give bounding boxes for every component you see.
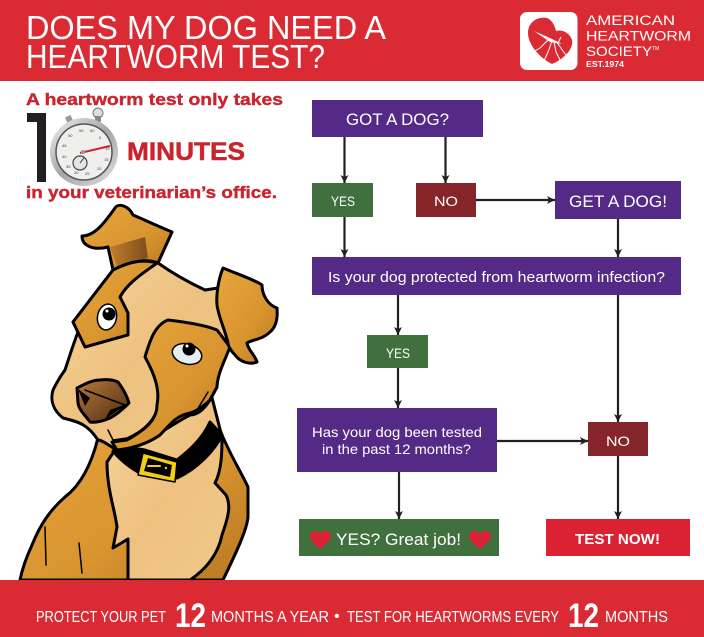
big numeral 1 of the 10 <box>27 113 46 182</box>
icon: stopwatch as the 0 of the 10: 50 <box>68 133 73 138</box>
big numeral 1 of the 10: 1 <box>14 93 69 203</box>
ear inner <box>110 237 148 268</box>
dog floppy ear <box>217 268 277 363</box>
illustration: dog <box>20 205 277 580</box>
logo: American Heartworm Society: SOCIETY <box>586 43 653 59</box>
footer band: • <box>334 608 340 625</box>
footer band: PROTECT YOUR PET <box>36 609 166 626</box>
fur lines <box>45 527 82 573</box>
icon: stopwatch as the 0 of the 10: 10 <box>105 146 110 151</box>
box: great job: YES? Great job! <box>336 530 461 549</box>
text: in your veterinarian's office: in your veterinarian’s office. <box>26 183 277 202</box>
forehead and left eye patch <box>73 261 157 347</box>
icon: stopwatch as the 0 of the 10: 55 <box>79 128 84 133</box>
header band <box>0 0 704 81</box>
icon: heart right <box>469 531 491 549</box>
dog upright ear <box>82 205 172 270</box>
box: yes <box>312 183 373 217</box>
footer band <box>0 580 704 637</box>
box: tested question: in the past 12 months? <box>322 441 471 457</box>
box: no <box>416 183 476 217</box>
muzzle lines <box>108 392 208 440</box>
box: yes, protected <box>367 335 428 368</box>
box: yes, protected: YES <box>386 345 410 361</box>
box: protected question <box>312 257 681 295</box>
right eye patch <box>112 320 230 450</box>
arrows <box>344 137 618 519</box>
text: minutes: MINUTES <box>127 138 245 166</box>
box: test now <box>546 519 690 556</box>
text: heartworm test only takes: A heartworm test only takes <box>26 90 283 109</box>
logo: American Heartworm Society: HEARTWORM <box>586 28 691 44</box>
dog nose <box>77 380 129 422</box>
icon: stopwatch as the 0 of the 10: 5 <box>99 135 102 140</box>
icon: stopwatch as the 0 of the 10: 45 <box>62 143 67 148</box>
icon: stopwatch as the 0 of the 10: 30 <box>74 170 79 175</box>
title: DOES MY DOG NEED A <box>26 9 386 46</box>
box: protected question: Is your dog protected from heartworm infection? <box>328 270 665 286</box>
box: get a dog <box>555 181 681 219</box>
box: yes: YES <box>331 193 355 209</box>
footer band: 12 <box>568 597 599 635</box>
logo: American Heartworm Society: TM <box>652 46 659 52</box>
logo: American Heartworm Society: EST.1974 <box>586 60 625 69</box>
footer band: MONTHS <box>605 609 668 626</box>
icon: stopwatch as the 0 of the 10 <box>50 108 118 186</box>
left eye <box>95 303 119 331</box>
box: got a dog: GOT A DOG? <box>346 111 449 129</box>
title: HEARTWORM TEST? <box>26 38 325 75</box>
icon: stopwatch as the 0 of the 10: 40 <box>62 154 67 159</box>
footer band: TEST FOR HEARTWORMS EVERY <box>347 609 559 626</box>
flowchart <box>297 100 690 556</box>
footer band: 12 <box>175 597 206 635</box>
box: test now: TEST NOW! <box>575 531 660 548</box>
collar buckle <box>138 453 177 482</box>
box: got a dog <box>312 100 483 137</box>
dog head <box>52 261 228 450</box>
box: get a dog: GET A DOG! <box>569 192 667 211</box>
logo: American Heartworm Society <box>520 12 691 70</box>
icon: stopwatch as the 0 of the 10: 20 <box>97 166 102 171</box>
right eye <box>170 340 204 368</box>
icon: stopwatch as the 0 of the 10: 60 <box>90 128 95 133</box>
icon: heart left <box>310 531 331 549</box>
box: great job <box>299 519 499 556</box>
dog body <box>20 398 248 580</box>
box: tested question: Has your dog been tested <box>312 424 482 440</box>
icon: stopwatch as the 0 of the 10: 25 <box>85 171 90 176</box>
icon: stopwatch as the 0 of the 10: 15 <box>104 157 109 162</box>
box: tested question <box>297 408 497 472</box>
box: no, not tested: NO <box>606 433 630 449</box>
footer band: MONTHS A YEAR <box>211 609 329 626</box>
collar <box>113 422 222 478</box>
box: no, not tested <box>588 422 648 456</box>
title <box>26 9 386 75</box>
icon: stopwatch as the 0 of the 10: 35 <box>66 164 71 169</box>
dog chest <box>107 398 229 580</box>
box: no: NO <box>434 193 458 209</box>
logo: American Heartworm Society: AMERICAN <box>586 12 675 28</box>
